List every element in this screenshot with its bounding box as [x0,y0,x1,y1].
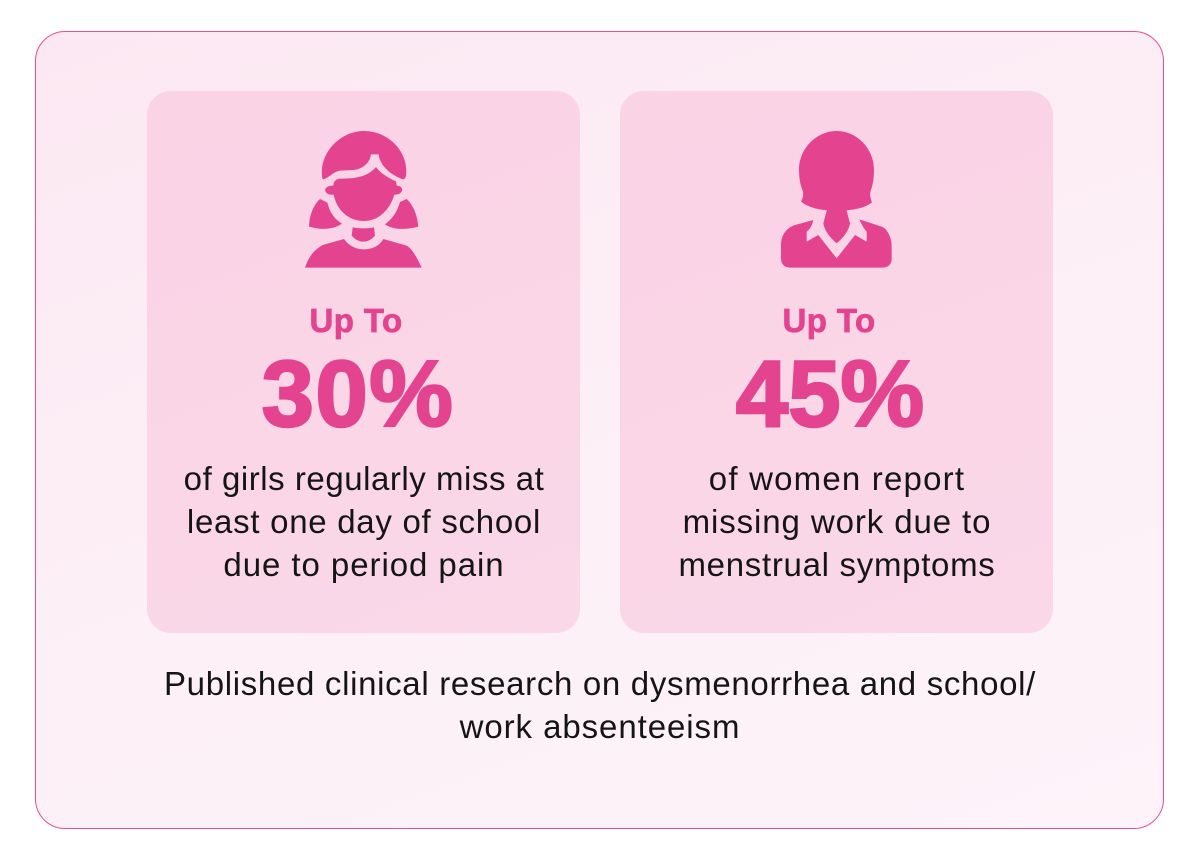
text: women description: missing work due to [683,503,991,540]
text: girls description: due to period pain [223,546,505,583]
text: girls description: least one day of school [187,503,541,540]
icon: girl with pigtails [305,131,422,268]
icon: woman in collared shirt [781,131,892,268]
panel: girls statistic [147,91,580,633]
statistic: 30%: 30% [262,341,454,446]
label: up to, women: Up To [782,302,876,339]
text: girls description: of girls regularly miss at [184,460,544,497]
statistic: 45%: 45% [736,341,924,446]
source note: Published clinical research on dysmenorrhea and school/ [164,665,1036,702]
text: women description [678,460,996,583]
source note [164,665,1036,745]
source note: work absenteeism [460,708,740,745]
text: girls description [184,460,544,583]
label: up to, girls: Up To [309,302,403,339]
text: women description: of women report [709,460,965,497]
text: women description: menstrual symptoms [678,546,996,583]
panel: women statistic [620,91,1053,633]
